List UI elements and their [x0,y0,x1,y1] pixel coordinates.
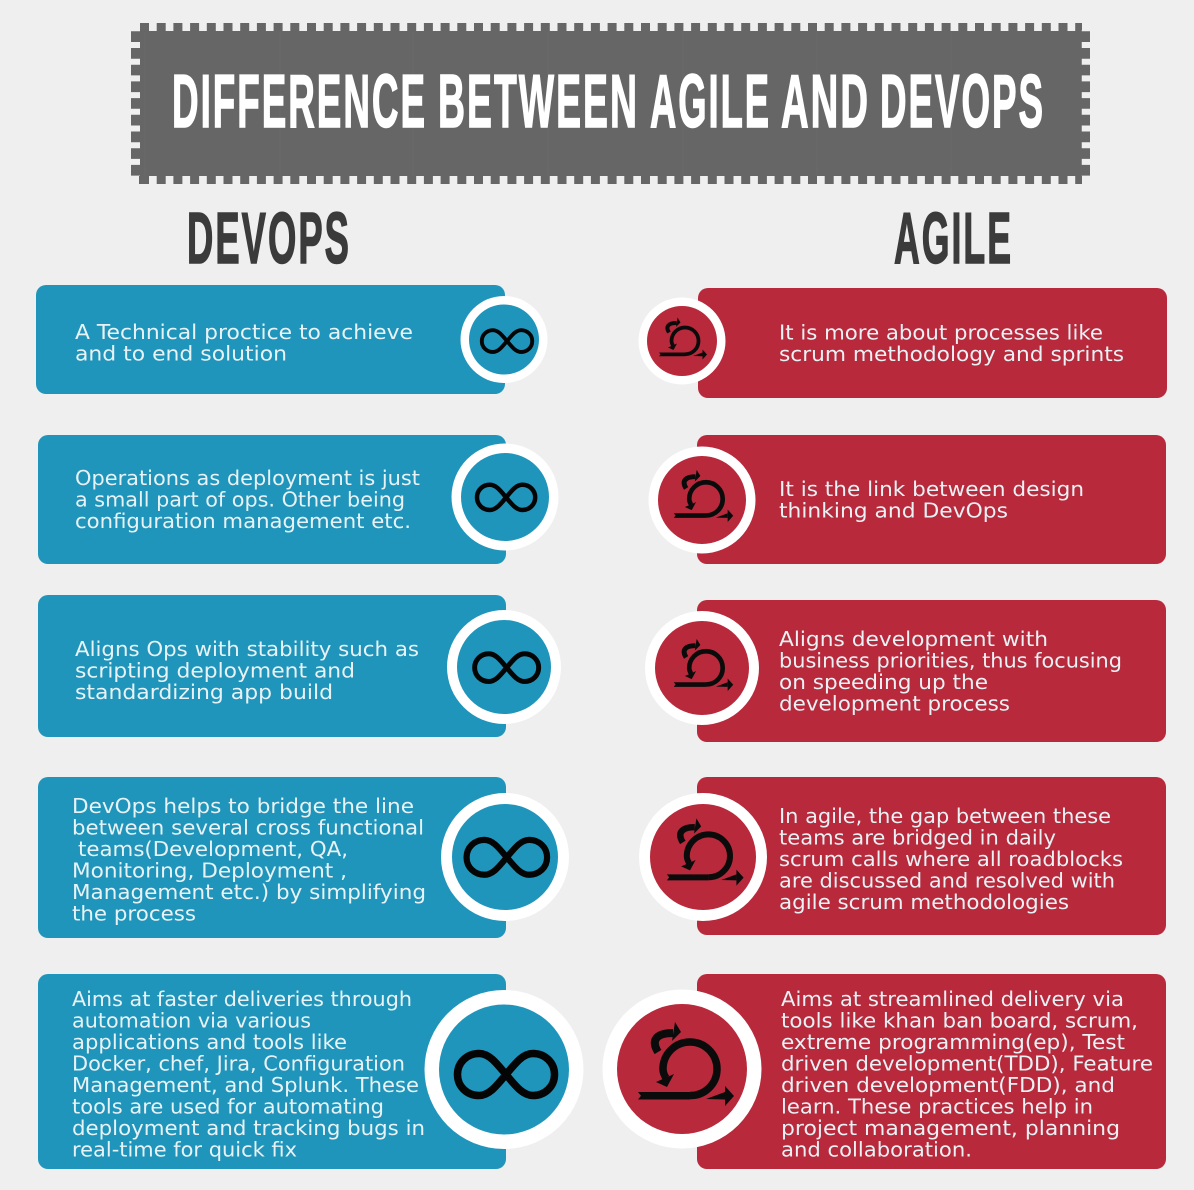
text: agile row 3: business priorities, thus focusing [779,648,1122,672]
text: AGILE [894,199,1013,279]
text: agile row 4: are discussed and resolved with [779,868,1115,892]
text: devops row 3: Aligns Ops with stability such as [75,637,419,661]
icon: scrum loop row 3 [645,611,759,725]
icon: scrum loop row 2 [648,446,756,554]
panel: devops row 3 [38,595,561,737]
text: devops row 5: applications and tools like [72,1030,347,1054]
text: devops row 3 [75,637,419,704]
text: devops row 5: Aims at faster deliveries through [72,987,412,1011]
text: agile row 5: learn. These practices help in [781,1094,1093,1118]
text: agile row 5 [781,987,1153,1162]
title banner [131,23,1090,184]
text: devops row 4: between several cross functional [72,816,424,840]
text: devops row 3: standardizing app build [75,680,333,704]
icon: infinity row 2 [452,444,558,550]
text: agile row 1: scrum methodology and sprints [779,342,1124,366]
text: devops row 4: teams(Development, QA, [78,837,348,861]
panel: agile row 3 [645,600,1166,742]
title text: AND [781,59,870,143]
text: agile row 4 [779,804,1123,914]
text: agile row 4: scrum calls where all roadblocks [779,847,1123,871]
panel: devops row 5 [38,974,584,1169]
text: devops row 4: Monitoring, Deployment , [72,858,347,882]
icon: infinity row 1 [460,296,548,383]
text: devops row 5 [72,987,425,1162]
icon: infinity row 4 [441,793,569,921]
text: agile row 1: It is more about processes like [779,320,1103,344]
text: devops row 2: configuration management etc. [75,509,411,533]
text: agile row 2: thinking and DevOps [779,498,1008,522]
panel: agile row 4 [639,777,1166,935]
text: devops row 5: deployment and tracking bugs in [72,1116,425,1140]
text: agile row 3: on speeding up the [779,670,988,694]
text: agile row 5: tools like khan ban board, scrum, [781,1008,1138,1032]
text: agile row 3 [779,627,1122,716]
heading: DevOps: DEVOPS [187,199,351,279]
text: devops row 2: Operations as deployment is just [75,466,420,490]
text: agile row 5: and collaboration. [781,1138,972,1162]
text: agile row 4: In agile, the gap between these [779,804,1111,828]
text: agile row 1 [779,320,1124,366]
text: agile row 4: teams are bridged in daily [779,826,1056,850]
text: devops row 1: A Technical proctice to achieve [75,320,413,344]
icon: infinity row 3 [447,610,561,724]
panel: agile row 2 [648,435,1166,564]
panel: devops row 2 [38,435,558,564]
text: agile row 3: Aligns development with [779,627,1048,651]
panel: agile row 1 [638,288,1167,398]
icon: scrum loop row 5 [602,990,762,1148]
text: devops row 5: Management, and Splunk. These [72,1073,419,1097]
text: devops row 4 [72,794,426,926]
title text: BETWEEN [438,59,639,143]
text: agile row 2: It is the link between design [779,477,1084,501]
text: devops row 3: scripting deployment and [75,658,355,682]
panel: devops row 4 [38,777,569,938]
text: agile row 5: driven development(TDD), Feature [781,1052,1153,1076]
text: agile row 2 [779,477,1084,522]
text: devops row 5: Docker, chef, Jira, Configuration [72,1052,405,1076]
icon: infinity row 5 [424,990,584,1149]
text: devops row 4: DevOps helps to bridge the line [72,794,414,818]
text: agile row 5: driven development(FDD), and [781,1073,1115,1097]
text: agile row 3: development process [779,692,1010,716]
text: devops row 2 [75,466,420,533]
title text [172,59,1045,143]
title text: DIFFERENCE [172,59,427,143]
title text: AGILE [650,59,771,143]
panel: agile row 5 [602,974,1166,1169]
text: devops row 5: tools are used for automating [72,1094,384,1118]
text: agile row 5: extreme programming(ep), Test [781,1030,1125,1054]
text: devops row 1 [75,320,413,366]
panel: devops row 1 [36,285,548,394]
icon: scrum loop row 1 [638,298,726,384]
text: devops row 2: a small part of ops. Other being [75,488,405,512]
text: devops row 5: automation via various [72,1008,311,1032]
text: agile row 5: Aims at streamlined delivery via [781,987,1124,1011]
text: devops row 4: Management etc.) by simplifying [72,880,426,904]
icon: scrum loop row 4 [639,793,767,921]
text: devops row 1: and to end solution [75,342,287,366]
text: agile row 4: agile scrum methodologies [779,890,1069,914]
text: agile row 5: project management, planning [781,1116,1120,1140]
text: devops row 4: the process [72,902,196,926]
text: devops row 5: real-time for quick fix [72,1138,297,1162]
